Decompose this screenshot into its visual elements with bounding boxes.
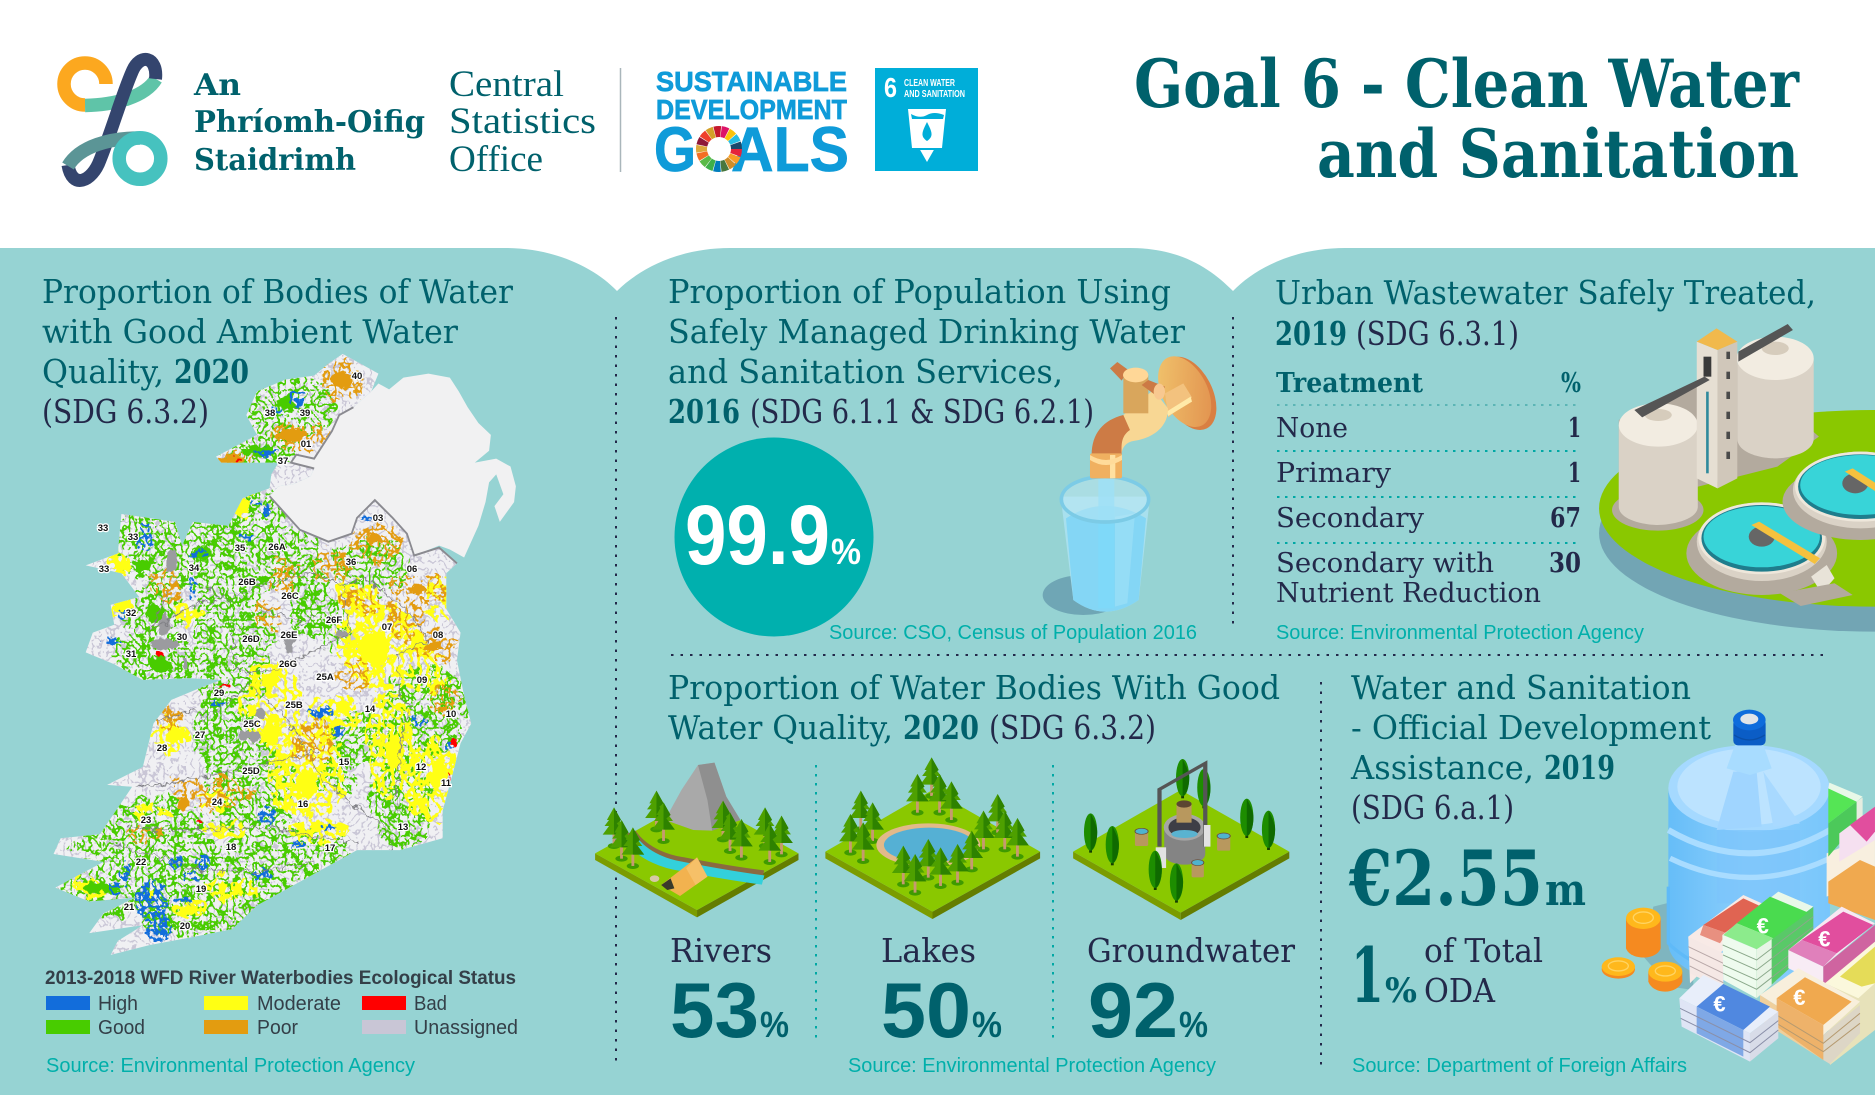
rivers stat: %	[760, 1004, 789, 1045]
map legend: 2013-2018 WFD River Waterbodies Ecological Status	[45, 968, 516, 989]
stat circle 99.9%	[674, 438, 874, 636]
blue stack	[1679, 975, 1778, 1062]
source: map: Source: Environmental Protection Agency	[46, 1054, 416, 1077]
wastewater treatment table: Secondary	[1276, 502, 1424, 534]
wastewater treatment table: Secondary with	[1276, 547, 1494, 579]
map basin labels: 03	[373, 513, 383, 524]
heading: water bodies: Water Quality,	[668, 708, 893, 747]
title: Goal 6 - Clean Water	[1134, 45, 1800, 123]
wastewater treatment table: 1	[1568, 412, 1581, 444]
CSO English name: Statistics	[449, 101, 596, 142]
map basin labels: 26G	[279, 659, 297, 670]
illustration: groundwater tile	[1073, 759, 1289, 920]
source: foreign affairs: Source: Department of Foreign Affairs	[1352, 1054, 1687, 1077]
map basin labels: 28	[157, 743, 167, 754]
map basin labels: 29	[214, 688, 224, 699]
rivers stat: Rivers	[670, 931, 772, 970]
wastewater treatment table: Nutrient Reduction	[1276, 577, 1541, 609]
rivers stat	[670, 931, 789, 1054]
heading: water bodies	[668, 668, 1280, 747]
lakes stat: %	[972, 1004, 1002, 1045]
SDG 6 tile	[875, 68, 978, 171]
basin boundaries	[114, 573, 428, 872]
CSO Irish name: Phríomh-Oifig	[194, 105, 425, 140]
heading: development assistance: - Official Development	[1351, 708, 1711, 747]
SDG wordmark: G	[654, 115, 696, 185]
pink stack: €	[1818, 927, 1831, 952]
map of Ireland: river waterbodies status	[36, 340, 516, 973]
illustration: rivers tile	[595, 763, 798, 917]
groundwater stat: Groundwater	[1087, 931, 1295, 970]
CSO Irish name: An	[193, 68, 241, 103]
SDG wordmark: SUSTAINABLE	[656, 66, 847, 97]
heading: wastewater: 2019	[1275, 314, 1347, 353]
wastewater treatment table: Treatment	[1276, 367, 1423, 399]
heading: ambient water quality: 2020	[174, 352, 249, 391]
map basin labels: 25B	[285, 700, 303, 711]
heading: development assistance: Water and Sanitation	[1351, 668, 1691, 707]
ODA share	[1351, 931, 1543, 1020]
map basin labels: 24	[212, 797, 223, 808]
illustration: treatment plant	[1599, 324, 1875, 632]
Northern Ireland	[270, 374, 516, 557]
heading: development assistance: Assistance,	[1350, 748, 1534, 787]
map basin labels: 25D	[242, 766, 260, 777]
map basin labels: 31	[126, 649, 137, 660]
wastewater treatment table: 1	[1568, 457, 1581, 489]
map basin labels: 34	[189, 563, 200, 574]
map basin labels: 26F	[326, 615, 342, 626]
panel divider lines	[616, 317, 1827, 1070]
map basin labels: 25C	[243, 719, 261, 730]
map legend: High	[98, 993, 138, 1015]
map legend: Moderate	[257, 993, 341, 1015]
Republic of Ireland river network	[54, 354, 472, 955]
rivers stat: 53	[670, 966, 759, 1054]
map basin labels: 26C	[281, 591, 299, 602]
lakes stat: Lakes	[881, 931, 976, 970]
coins	[1602, 908, 1682, 992]
SDG wordmark	[654, 66, 849, 185]
map basin labels: 16	[298, 799, 308, 810]
groundwater stat: 92	[1088, 966, 1178, 1054]
source: wastewater: Source: Environmental Protection Agency	[1276, 621, 1645, 644]
back stacks	[1827, 783, 1875, 920]
map basin labels: 13	[398, 822, 408, 833]
icon: tap and glass	[1043, 348, 1228, 615]
heading: population services: Proportion of Population Using	[668, 272, 1171, 311]
map basin labels: 09	[417, 675, 427, 686]
yellow stack	[1825, 942, 1875, 1065]
orange stack	[1760, 968, 1860, 1064]
page background panel	[0, 248, 1875, 1095]
stat circle 99.9%: %	[831, 531, 861, 572]
SDG 6 tile: 6	[884, 72, 897, 103]
blue stack: €	[1713, 992, 1726, 1017]
inner dividers	[816, 765, 1053, 1040]
heading: population services: 2016	[668, 392, 740, 431]
heading: development assistance: 2019	[1544, 748, 1615, 787]
heading: wastewater: Urban Wastewater Safely Treated,	[1275, 273, 1816, 312]
heading: ambient water quality: (SDG 6.3.2)	[42, 392, 209, 431]
map basin labels: 26D	[242, 634, 260, 645]
lakes stat	[881, 931, 1002, 1054]
heading: ambient water quality: Proportion of Bodies of Water	[42, 272, 513, 311]
wastewater treatment table: %	[1561, 367, 1581, 399]
water bottle	[1668, 710, 1830, 983]
CSO English name: Office	[449, 139, 543, 180]
ODA share: %	[1385, 971, 1417, 1011]
green stack	[1722, 892, 1813, 998]
map basin labels: 27	[195, 730, 205, 741]
map basin labels: 26A	[268, 542, 286, 553]
ODA share: ODA	[1424, 971, 1496, 1010]
heading: development assistance	[1350, 668, 1711, 827]
CSO Irish name	[193, 68, 425, 178]
wastewater treatment table: 30	[1549, 547, 1581, 579]
source: population: Source: CSO, Census of Population 2016	[829, 621, 1197, 644]
SDG wordmark: ALS	[731, 115, 849, 185]
national border	[270, 407, 457, 563]
map basin labels: 26E	[281, 630, 297, 641]
wastewater treatment table: None	[1276, 412, 1348, 444]
heading: wastewater	[1275, 273, 1816, 353]
map basin labels: 08	[433, 630, 443, 641]
map basin labels: 17	[325, 843, 335, 854]
map basin labels: 32	[126, 608, 136, 619]
map basin labels: 20	[180, 921, 190, 932]
map basin labels: 33	[98, 523, 108, 534]
map basin labels: 18	[226, 842, 236, 853]
title: and Sanitation	[1317, 115, 1799, 193]
heading: development assistance: (SDG 6.a.1)	[1351, 788, 1514, 827]
SDG 6 tile: CLEAN WATER	[904, 78, 956, 89]
CSO English name: Central	[449, 64, 564, 105]
orange stack: €	[1793, 985, 1806, 1010]
lakes stat: 50	[881, 966, 971, 1054]
map basin labels: 22	[136, 857, 146, 868]
map basin labels: 35	[235, 543, 246, 554]
heading: water bodies: Proportion of Water Bodies With Good	[668, 668, 1280, 707]
map basin labels: 12	[416, 762, 426, 773]
header divider	[620, 68, 622, 172]
map basin labels: 30	[177, 632, 187, 643]
heading: ambient water quality: Quality,	[42, 352, 164, 391]
groundwater stat: %	[1179, 1004, 1208, 1045]
map basin labels: 06	[407, 564, 417, 575]
heading: population services: (SDG 6.1.1 & SDG 6.2.1)	[750, 392, 1094, 431]
wastewater treatment table: 67	[1550, 502, 1581, 534]
map legend: Unassigned	[414, 1017, 518, 1039]
heading: population services	[668, 272, 1185, 431]
CSO logo mark	[64, 59, 161, 180]
source: water bodies: Source: Environmental Protection Agency	[848, 1054, 1217, 1077]
map basin labels: 21	[124, 902, 135, 913]
pink stack	[1788, 907, 1875, 985]
ODA share: 1	[1351, 931, 1384, 1020]
title	[1134, 45, 1800, 193]
map basin labels: 39	[300, 408, 310, 419]
heading: water bodies: (SDG 6.3.2)	[989, 708, 1156, 747]
red stack	[1688, 895, 1763, 990]
heading: population services: and Sanitation Services,	[668, 352, 1063, 391]
map basin labels: 37	[278, 456, 288, 467]
heading: ambient water quality	[42, 272, 513, 431]
heading: water bodies: 2020	[903, 708, 979, 747]
map legend: Bad	[414, 993, 447, 1015]
map legend: Good	[98, 1017, 145, 1039]
map basin labels: 33	[99, 564, 109, 575]
map legend: Poor	[257, 1017, 298, 1039]
map basin labels: 11	[441, 778, 452, 789]
map basin labels: 07	[382, 622, 392, 633]
ODA share: of Total	[1424, 931, 1543, 970]
ODA amount: m	[1545, 865, 1586, 916]
map basin labels: 25A	[316, 672, 334, 683]
icon: glass with drop	[908, 109, 946, 162]
map basin labels: 15	[339, 757, 350, 768]
CSO Irish name: Staidrimh	[194, 143, 356, 178]
illustration: water bottle and money	[1602, 710, 1875, 1065]
heading: population services: Safely Managed Drinking Water	[668, 312, 1185, 351]
SDG colour wheel	[702, 132, 736, 166]
map basin labels: 26B	[238, 577, 256, 588]
illustration: lakes tile	[825, 757, 1040, 919]
map basin labels: 38	[265, 408, 275, 419]
CSO English name	[449, 64, 596, 180]
map basin labels: 10	[446, 709, 456, 720]
map basin labels: 19	[196, 884, 206, 895]
map legend	[45, 968, 518, 1039]
map basin labels: 33	[128, 532, 138, 543]
wastewater treatment table: Primary	[1276, 457, 1391, 489]
heading: ambient water quality: with Good Ambient Water	[42, 312, 458, 351]
SDG wordmark: DEVELOPMENT	[656, 94, 847, 125]
stat circle 99.9%: 99.9	[685, 488, 830, 582]
map basin labels: 40	[352, 371, 362, 382]
map basin labels: 36	[346, 557, 356, 568]
groundwater stat	[1087, 931, 1295, 1054]
wastewater treatment table	[1276, 367, 1581, 609]
SDG 6 tile: AND SANITATION	[904, 89, 965, 100]
ODA amount: €2.55	[1348, 834, 1543, 923]
map basin labels: 23	[141, 815, 151, 826]
heading: wastewater: (SDG 6.3.1)	[1356, 314, 1519, 353]
map basin labels	[98, 371, 456, 932]
map basin labels: 14	[365, 704, 376, 715]
map basin labels: 01	[301, 439, 312, 450]
green stack: €	[1757, 913, 1769, 938]
